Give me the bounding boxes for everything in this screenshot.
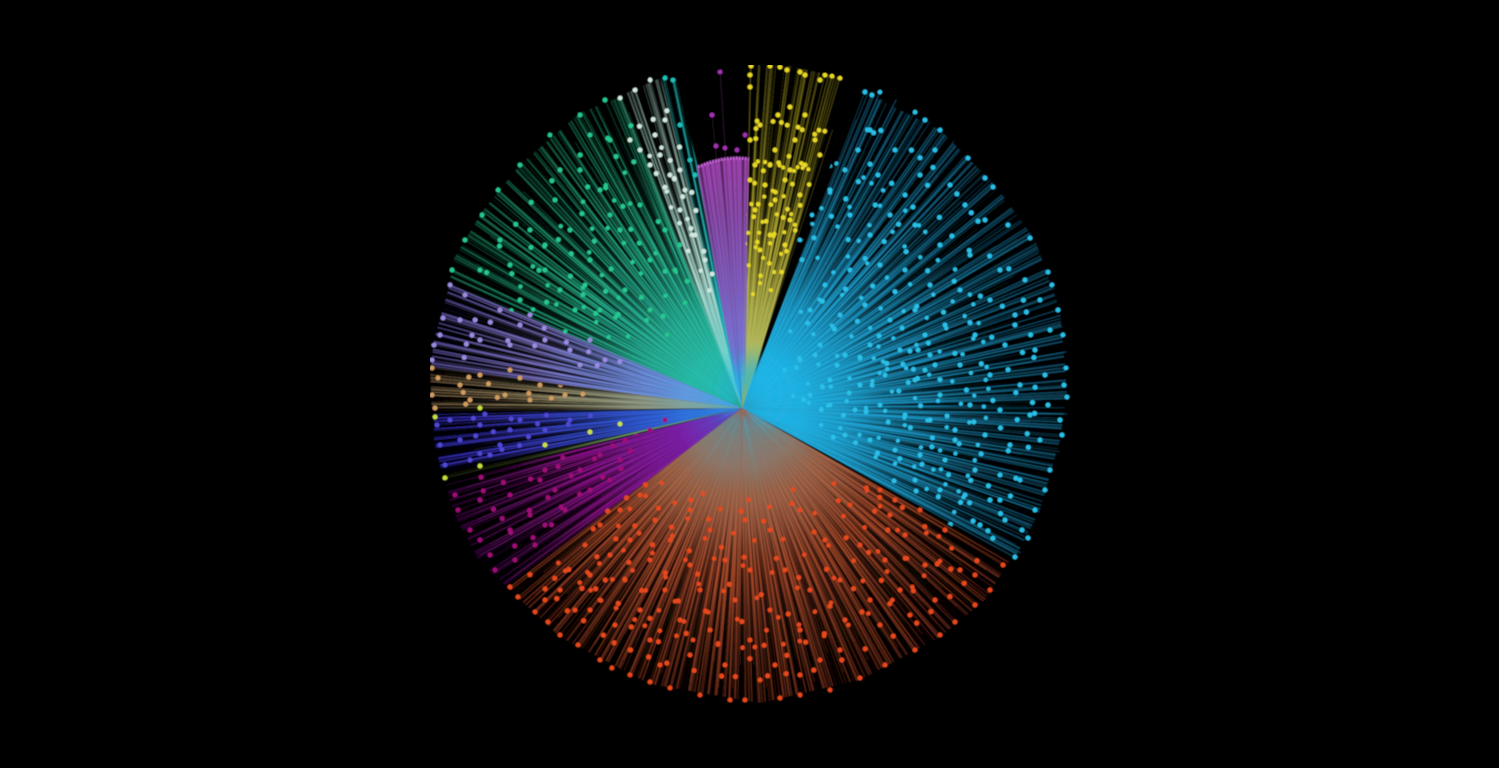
- spokes: magenta: [458, 408, 742, 570]
- sector: lavender: [431, 284, 742, 408]
- dots: orange: [510, 490, 1003, 700]
- extra spokes: orange: [534, 408, 986, 689]
- dots: tan: [432, 368, 565, 408]
- sector: orange: [508, 408, 1010, 703]
- purple rim arc: [698, 158, 749, 167]
- sector: indigo: [434, 408, 742, 474]
- spokes: teal: [665, 78, 742, 408]
- extra dots: green: [485, 120, 694, 341]
- extra spokes: green: [476, 112, 742, 408]
- spokes: yellow: [742, 66, 840, 408]
- extra dots: magenta: [478, 432, 639, 550]
- dots: yellow: [750, 66, 840, 250]
- sector: blue: [742, 92, 1067, 558]
- spokes: purple: [712, 72, 742, 408]
- extra spokes: blue: [743, 98, 1068, 554]
- spokes: white: [620, 80, 742, 408]
- spokes: green: [452, 100, 742, 408]
- sector: green: [450, 95, 742, 408]
- dots: [432, 66, 1067, 700]
- extra dots: yellow: [743, 121, 832, 294]
- spokes: indigo: [437, 408, 742, 465]
- dots: purple: [712, 72, 745, 150]
- sector: teal: [662, 78, 742, 408]
- dots: magenta: [455, 420, 665, 570]
- sector: tan: [430, 368, 742, 412]
- spokes: [432, 66, 1067, 700]
- extra dots: indigo: [473, 414, 590, 456]
- extra dots: orange: [519, 466, 979, 685]
- radial burst chart: [430, 65, 1070, 703]
- spokes: blue: [742, 92, 1067, 557]
- colour sectors: [430, 65, 1067, 703]
- spokes: tan: [432, 368, 742, 408]
- spokes: lavender: [434, 285, 742, 408]
- dots: white: [620, 80, 705, 260]
- sector: lime sliver: [444, 408, 742, 480]
- dots: blue: [800, 92, 1067, 557]
- extra dots: tan: [463, 368, 583, 406]
- dots: teal: [665, 78, 695, 175]
- centre glow: [724, 362, 784, 422]
- dots: green: [452, 100, 675, 310]
- purple streaks: [698, 158, 748, 300]
- burst wrapper: [430, 65, 1083, 703]
- spokes: orange: [510, 408, 1003, 700]
- sector: magenta: [446, 408, 742, 588]
- sector: purple: [697, 158, 749, 408]
- streak gaps: [562, 228, 922, 588]
- extra dots: blue: [776, 127, 1049, 557]
- sector: yellow: [744, 65, 843, 408]
- extra dots: lavender: [460, 314, 623, 368]
- extra dots: white: [636, 110, 716, 292]
- dots: lavender: [432, 285, 605, 365]
- sector: pale white-green: [622, 78, 742, 408]
- dots: lime: [435, 408, 620, 478]
- dots: indigo: [437, 420, 570, 465]
- extra spokes: yellow: [742, 117, 833, 410]
